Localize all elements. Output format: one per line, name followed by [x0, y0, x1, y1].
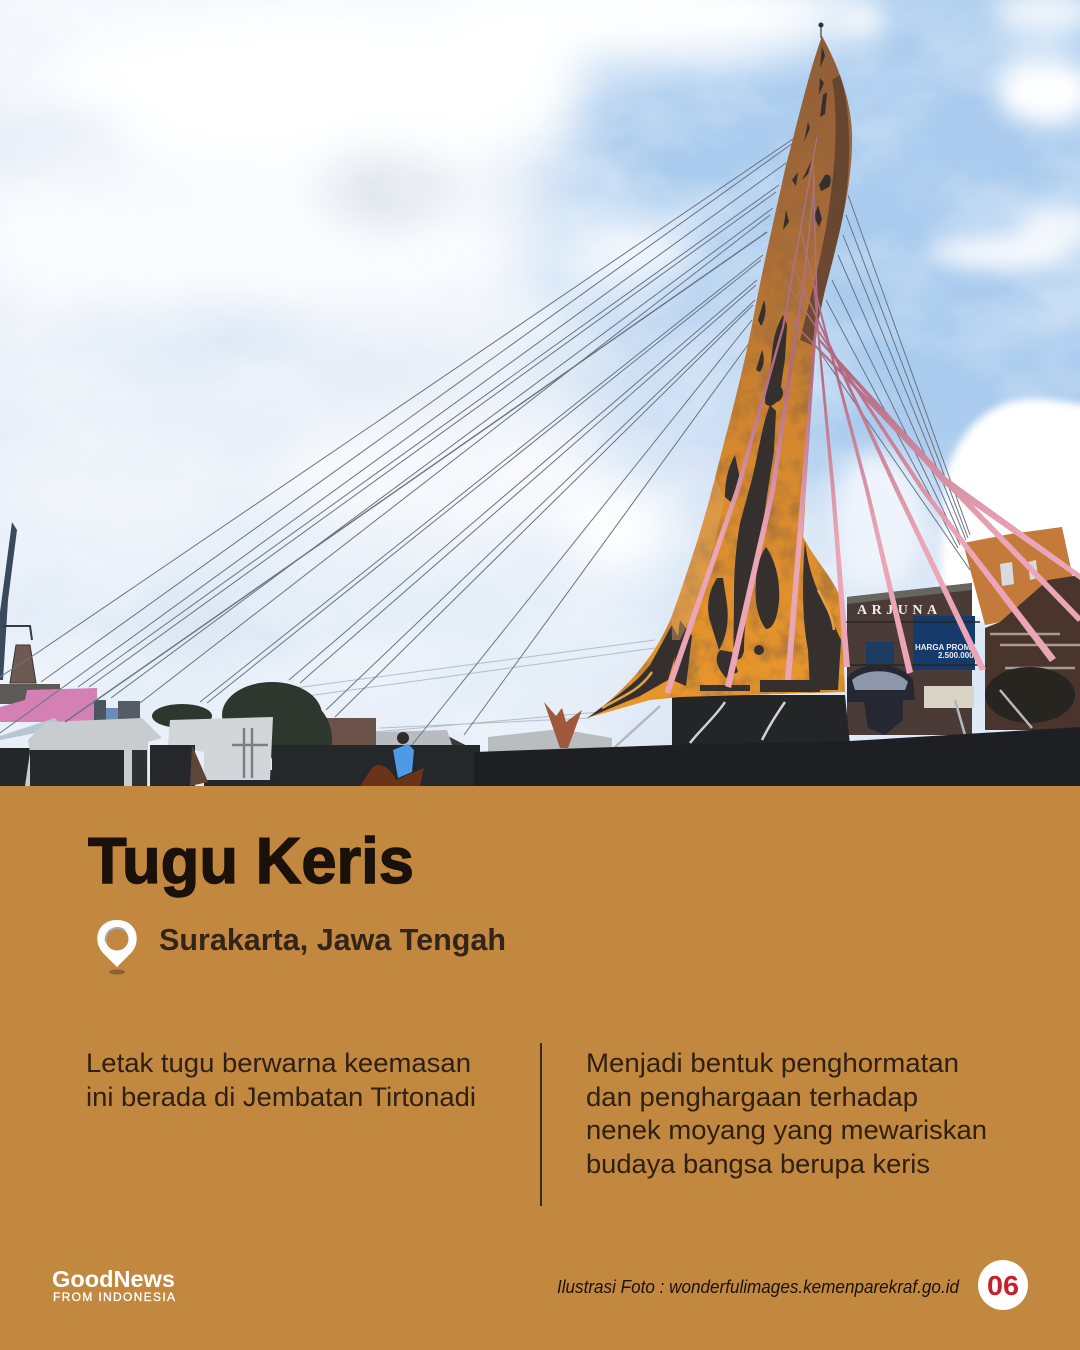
logo: GoodNews from Indonesia — [52, 1266, 175, 1304]
ornamental plant — [544, 702, 582, 748]
logo: GoodNews from Indonesia: FROM INDONESIA — [53, 1290, 175, 1304]
text block: right column: budaya bangsa berupa keris — [586, 1149, 930, 1179]
keris blade monument — [580, 22, 860, 718]
lantern tower — [0, 522, 36, 683]
motorcycle rider — [360, 732, 424, 786]
Arjuna shop building — [844, 583, 980, 735]
text block: right column: Menjadi bentuk penghormatan — [586, 1048, 959, 1078]
page number badge — [978, 1260, 1028, 1310]
powerlines — [280, 640, 655, 735]
text block: right column — [586, 1048, 987, 1179]
blade batik pattern — [580, 30, 860, 718]
caption panel — [0, 786, 1080, 1350]
title: Tugu Keris — [88, 824, 414, 897]
text block: left column: ini berada di Jembatan Tirtonadi — [86, 1082, 476, 1112]
text block: left column — [86, 1048, 476, 1112]
left buildings and trees — [0, 522, 612, 786]
icon: location pin — [97, 920, 137, 974]
truck box — [150, 717, 273, 786]
Arjuna shop building: ARJUNA — [857, 603, 942, 618]
text block: left column: Letak tugu berwarna keemasan — [86, 1048, 471, 1078]
sky with clouds — [0, 0, 1080, 820]
photo: Tugu Keris monument against the sky — [0, 0, 1080, 820]
text block: right column: dan penghargaan terhadap — [586, 1082, 918, 1112]
left stay cables — [0, 139, 793, 745]
bell shaped sculpture — [847, 665, 915, 735]
Arjuna shop building: 2.500.000 — [938, 651, 974, 660]
kiosk — [25, 718, 162, 786]
monument pedestal — [614, 690, 1032, 748]
location subtitle: Surakarta, Jawa Tengah — [159, 922, 506, 957]
right stay cables — [815, 195, 970, 570]
photo credit: Ilustrasi Foto : wonderfulimages.kemenparekraf.go.id — [557, 1277, 960, 1297]
page number badge: 06 — [987, 1270, 1019, 1301]
logo: GoodNews from Indonesia: GoodNews — [52, 1266, 175, 1292]
text block: right column: nenek moyang yang mewariskan — [586, 1115, 987, 1145]
Arjuna shop building: HARGA PROMO — [915, 643, 976, 652]
dark foreground wall — [474, 727, 1080, 786]
column divider — [540, 1043, 542, 1206]
orange building behind the monument — [963, 527, 1080, 730]
pink ropes — [664, 137, 1080, 694]
